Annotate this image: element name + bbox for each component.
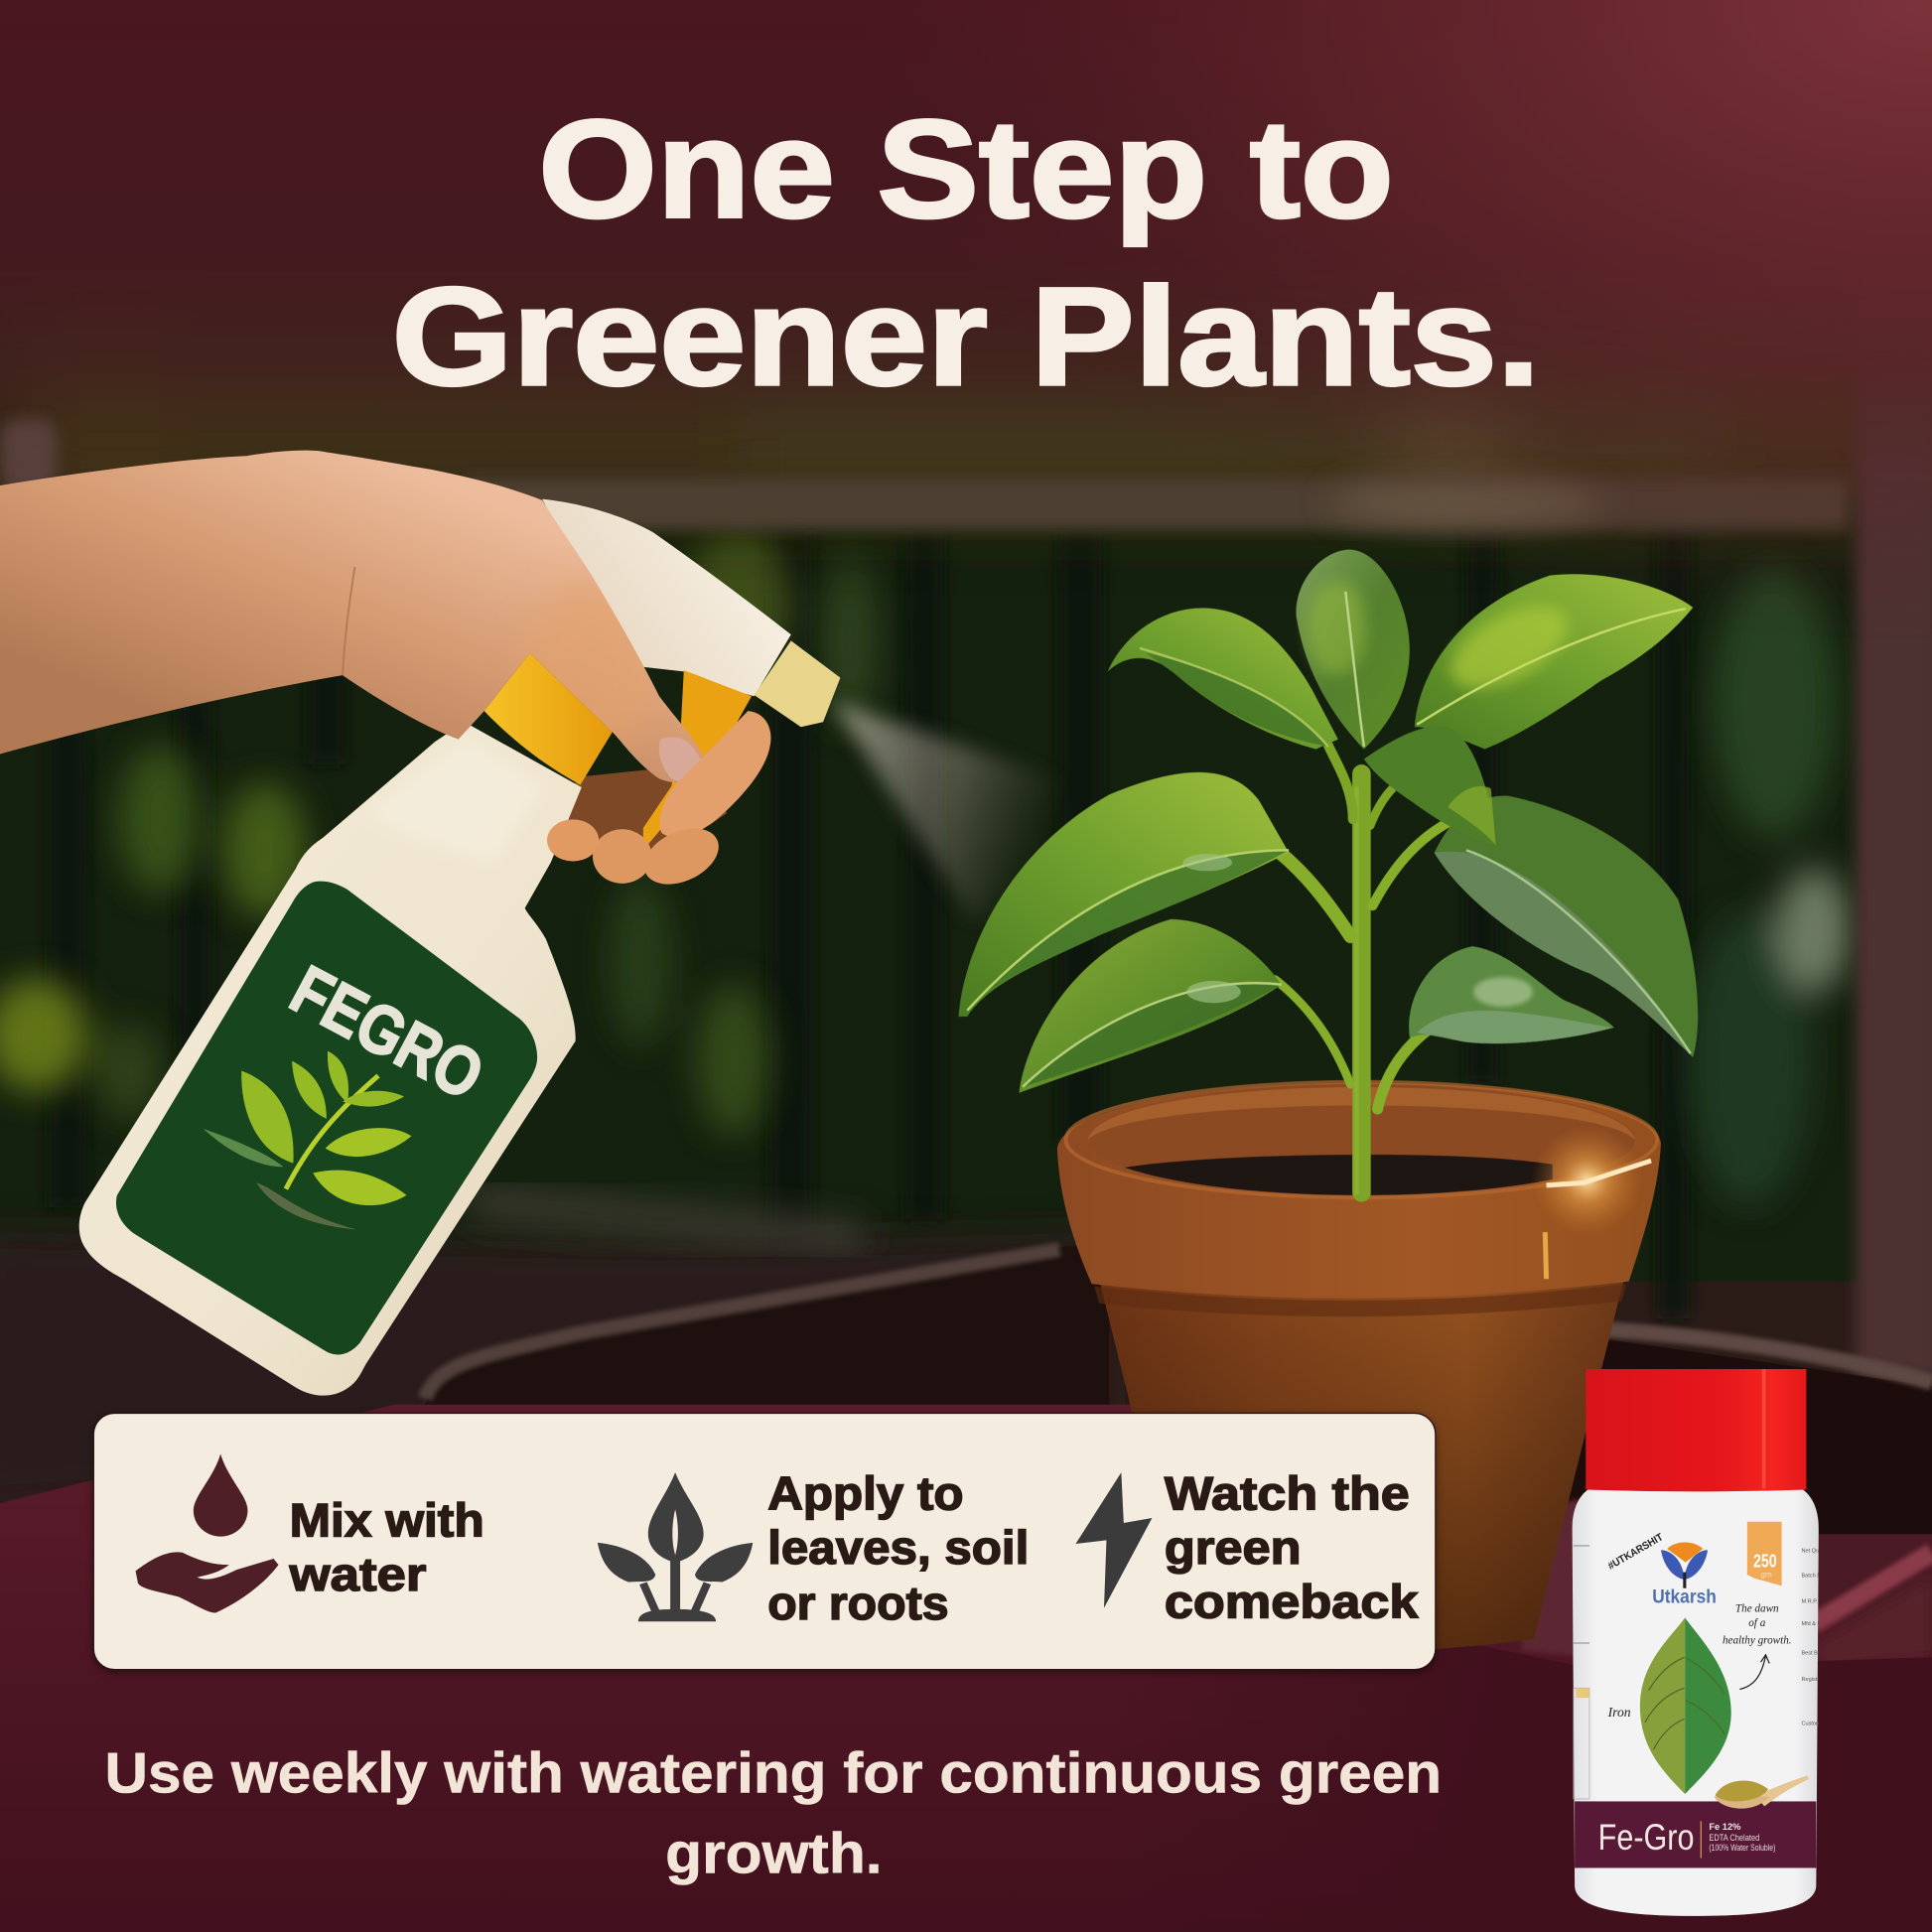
arrow [1739, 1655, 1769, 1690]
spoon with powder [1714, 1775, 1809, 1809]
trigger [643, 670, 752, 850]
icon: lightning bolt [1075, 1472, 1152, 1608]
jar tagline: of a [1748, 1617, 1766, 1629]
step 3 text [1165, 1466, 1419, 1628]
table surface [0, 1405, 1932, 1932]
step 1 text [289, 1494, 484, 1600]
product jar: Fe-Gro [1573, 1369, 1833, 1916]
bottom floor [1370, 1646, 1932, 1789]
jar cap [1586, 1369, 1806, 1491]
iron label: Iron [1607, 1705, 1631, 1720]
step 1 text: Mix with [290, 1494, 484, 1547]
step 3 text: comeback [1165, 1576, 1419, 1628]
railing [469, 479, 1849, 530]
jar band: (100% Water Soluble) [1709, 1843, 1775, 1853]
step 2 text: or roots [767, 1577, 949, 1629]
leaf: upper right [1415, 574, 1693, 750]
side print: Registration [1801, 1677, 1831, 1683]
jar tagline: The dawn [1735, 1602, 1779, 1614]
pot [1057, 1082, 1661, 1652]
jar leaf [1640, 1618, 1731, 1794]
spray mist [833, 702, 1067, 921]
size tag [1747, 1522, 1782, 1586]
leaf: middle right small [1364, 726, 1496, 845]
label text FEGRO: FEGRO [279, 950, 495, 1115]
step 3 text: Watch the [1165, 1466, 1410, 1519]
top maroon overlay [0, 0, 1932, 475]
bottle body [79, 722, 582, 1396]
leaf: big left [959, 772, 1289, 1017]
jar band [1575, 1801, 1816, 1867]
size tag: gm [1760, 1571, 1772, 1580]
jar band: EDTA Chelated [1709, 1833, 1759, 1843]
potted plant [959, 549, 1698, 1652]
brand logo: Utkarsh [1652, 1587, 1717, 1608]
side print: Mfd & Mktd [1801, 1621, 1830, 1627]
size tag: 250 [1753, 1551, 1777, 1572]
step 1 text: water [289, 1548, 426, 1600]
side print: Customer [1801, 1721, 1826, 1726]
tray right [1522, 1329, 1932, 1671]
side print [1574, 1545, 1833, 1799]
soil [1124, 1154, 1553, 1195]
leaf: upper left [1108, 608, 1338, 750]
nozzle [755, 640, 840, 727]
footer text [104, 1742, 1442, 1885]
side print: M.R.P. [1801, 1599, 1818, 1605]
step 2 text [767, 1466, 1029, 1629]
side print: Batch No. [1801, 1574, 1826, 1580]
thumb nail [659, 737, 702, 781]
blurred fence [0, 492, 1932, 1318]
sprayer head [542, 499, 791, 696]
icon: water drop [194, 1453, 247, 1537]
leaf: big right [1435, 796, 1698, 1057]
label plant logo [204, 1051, 412, 1230]
top right corner tint [1138, 0, 1932, 576]
fingers [547, 711, 770, 896]
jar tagline [1723, 1602, 1792, 1647]
leaf: lower left [1019, 919, 1282, 1093]
title [392, 90, 1540, 414]
arm and back of hand [0, 444, 727, 801]
palm behind bottle [548, 763, 727, 863]
leaf: lower right [1409, 946, 1614, 1043]
upper background glow [28, 378, 1857, 542]
title: One Step to [538, 90, 1394, 246]
collar [484, 653, 613, 785]
icon: open hand [136, 1552, 278, 1613]
jar tagline: healthy growth. [1723, 1635, 1792, 1647]
side print: Net Quantity [1801, 1549, 1833, 1555]
step 1: mix with water [136, 1453, 484, 1613]
brand logo: #UTKARSHIT [1606, 1531, 1666, 1573]
step 2: apply [598, 1466, 1029, 1629]
brand logo [1606, 1531, 1717, 1608]
step 2 text: leaves, soil [767, 1521, 1029, 1574]
leaf: top center [1296, 549, 1410, 750]
footer text: Use weekly with watering for continuous green [104, 1742, 1442, 1806]
title: Greener Plants. [392, 258, 1540, 414]
bottle label [116, 882, 537, 1354]
icon: sprout [598, 1472, 753, 1621]
stem [1269, 746, 1453, 1192]
jar body [1573, 1487, 1819, 1916]
step 2 text: Apply to [767, 1466, 964, 1519]
right post [1849, 401, 1932, 1380]
step 3 text: green [1165, 1521, 1302, 1574]
side print: Best Before [1801, 1651, 1831, 1657]
bottle highlight [369, 740, 542, 863]
hand and spray bottle [0, 444, 840, 1396]
jar band: Fe 12% [1709, 1822, 1741, 1832]
footer text: growth. [665, 1822, 883, 1885]
panel: usage steps [93, 1414, 1436, 1670]
jar band: Fe-Gro [1598, 1816, 1694, 1858]
ground and tray left [0, 1183, 1109, 1404]
step 3: watch [1075, 1466, 1419, 1628]
